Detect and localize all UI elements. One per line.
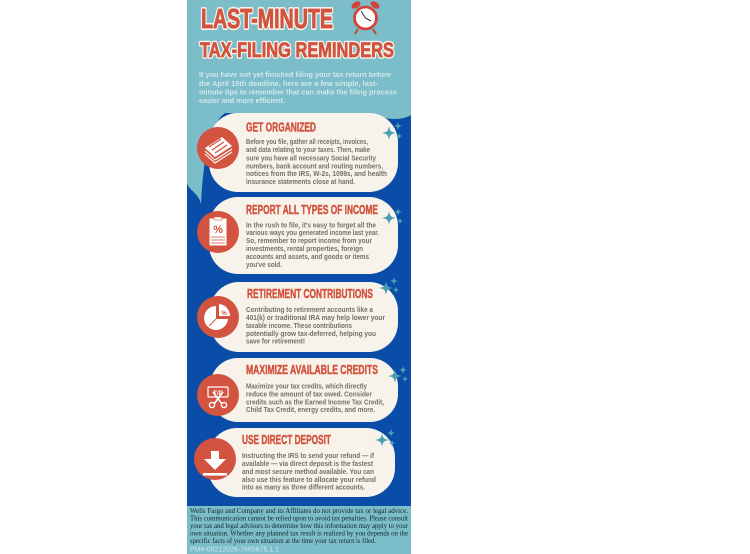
body text: 401(k) or traditional IRA may help lower your	[246, 315, 385, 322]
body text: save for retirement!	[246, 338, 305, 346]
body text: Contributing to retirement accounts like a	[246, 307, 373, 314]
body text: Child Tax Credit, energy credits, and more.	[246, 407, 375, 414]
body text: also use this feature to allocate your refund	[242, 477, 376, 484]
body text: notices from the IRS, W-2s, 1099s, and health	[246, 171, 387, 178]
body text: available — via direct deposit is the fastest	[242, 461, 374, 468]
body text: insurance statements close at hand.	[246, 179, 355, 186]
icon: clipboard with percent: %	[213, 224, 223, 236]
disclaimer text: Wells Fargo and Company and its Affiliates do not provide tax or legal advice.	[190, 506, 408, 515]
body text	[246, 139, 387, 186]
panel: disclaimer footer	[187, 506, 411, 554]
disclaimer text: your tax and legal advisors to determine how this information may apply to your	[190, 521, 409, 530]
icon: sparkles	[379, 277, 400, 295]
heading: MAXIMIZE AVAILABLE CREDITS	[246, 362, 378, 377]
icon: sparkles	[375, 429, 396, 447]
icon: stack of papers	[197, 127, 239, 169]
body text: So, remember to report income from your	[246, 238, 372, 245]
reference code: PM#-08212026-7665675.1.1	[190, 546, 279, 554]
icon: coupon and scissors	[197, 374, 239, 416]
disclaimer text: specific facts of your own situation at the time your tax return is filed.	[190, 536, 376, 545]
icon: coupon and scissors: T/P	[213, 390, 224, 397]
body text: credits such as the Earned Income Tax Credit,	[246, 400, 384, 406]
title: LAST-MINUTE	[201, 3, 333, 34]
heading: USE DIRECT DEPOSIT	[242, 432, 331, 447]
icon: download arrow	[194, 438, 236, 480]
body text: numbers, bank account and routing numbers,	[246, 164, 383, 170]
intro text: minute tips to remember that can make the filing process	[199, 88, 397, 96]
body text	[246, 307, 385, 346]
title: TAX-FILING REMINDERS	[200, 39, 394, 62]
teal header shape	[187, 0, 411, 204]
body text: taxable income. These contributions	[246, 323, 352, 330]
panel: retirement contributions	[197, 277, 400, 352]
body text: various ways you generated income last year.	[246, 230, 379, 237]
body text: sure you have all necessary Social Security	[246, 156, 376, 162]
body text: reduce the amount of tax owed. Consider	[246, 392, 372, 398]
icon: clipboard with percent	[197, 211, 239, 253]
icon: sparkles	[388, 366, 408, 383]
panel: use direct deposit	[194, 428, 396, 497]
body text	[242, 453, 376, 492]
intro text: easier and more efficient.	[199, 96, 285, 105]
background panel	[187, 0, 411, 554]
icon: sparkles	[382, 208, 404, 225]
disclaimer text	[190, 506, 409, 545]
icon: alarm clock	[350, 0, 381, 34]
body text: into as many as three different accounts.	[242, 484, 365, 492]
intro text	[199, 70, 397, 105]
body text	[246, 384, 384, 414]
heading: REPORT ALL TYPES OF INCOME	[246, 202, 378, 217]
heading: RETIREMENT CONTRIBUTIONS	[247, 286, 373, 301]
body text: and most secure method available. You can	[242, 469, 374, 476]
icon: pie chart: %	[221, 311, 227, 317]
intro text: the April 15th deadline, here are a few simple, last-	[199, 79, 378, 88]
body text	[246, 222, 379, 269]
panel: get organized	[197, 113, 402, 192]
title	[200, 3, 394, 62]
body text: and data relating to your taxes. Then, make	[246, 147, 370, 154]
panel: report all types of income	[197, 197, 404, 274]
body text: Instructing the IRS to send your refund — if	[242, 453, 375, 460]
panel: maximize available credits	[197, 358, 408, 422]
body text: Maximize your tax credits, which directly	[246, 384, 367, 390]
body text: investments, rental properties, foreign	[246, 246, 363, 253]
heading: GET ORGANIZED	[246, 120, 316, 134]
body text: potentially grow tax-deferred, helping you	[246, 331, 376, 338]
title: LAST-MINUTE	[201, 3, 333, 34]
title: TAX-FILING REMINDERS	[200, 39, 394, 62]
disclaimer text: own situation. Whether any planned tax result is realized by you depends on the	[190, 528, 408, 538]
intro text: If you have not yet finished filing your tax return before	[199, 70, 391, 79]
body text: accounts and assets, and goods or items	[246, 254, 369, 261]
disclaimer text: This communication cannot be relied upon to avoid tax penalties. Please consult	[190, 514, 408, 522]
body text: Before you file, gather all receipts, invoices,	[246, 139, 368, 146]
icon: pie chart	[197, 296, 239, 338]
icon: sparkles	[382, 122, 402, 140]
body text: you've sold.	[246, 262, 282, 269]
body text: In the rush to file, it's easy to forget all the	[246, 222, 376, 230]
